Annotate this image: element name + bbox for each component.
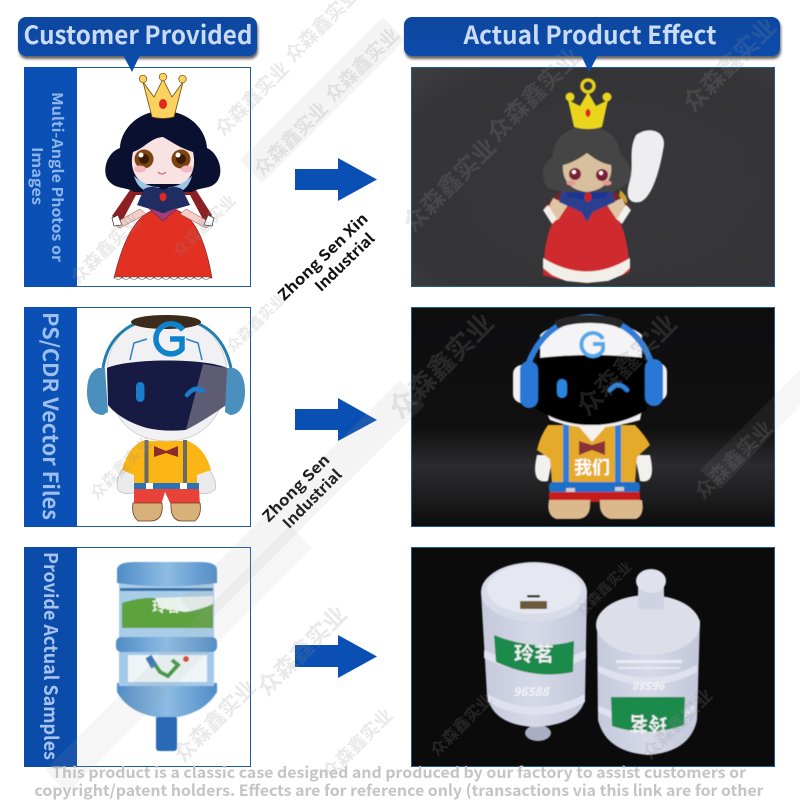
panel: miniature bottles result	[412, 548, 774, 766]
photo: right power bank bottle	[596, 569, 700, 755]
illustration: cartoon princess	[105, 73, 220, 280]
sidebar label: Multi-Angle Photos or Images: Multi-Angle Photos or	[47, 92, 68, 262]
footer disclaimer text	[34, 761, 764, 800]
panel: princess keychain result	[412, 68, 774, 286]
text: 众森鑫实业	[208, 55, 294, 141]
text: 众森鑫实业	[318, 21, 404, 107]
text: 众森鑫实业	[222, 289, 290, 357]
photo: right power bank bottle: 玲茗	[629, 711, 667, 738]
text: 众森鑫实业	[673, 8, 783, 118]
text: 众森鑫实业	[393, 128, 503, 238]
panel: actual samples input	[24, 547, 250, 767]
text: 众森鑫实业	[378, 303, 501, 426]
text: 众森鑫实业	[247, 95, 333, 181]
text: 众森鑫实业	[64, 207, 146, 289]
header: Customer Provided: Customer Provided	[24, 16, 252, 52]
photo: princess keychain	[543, 80, 664, 283]
photo: water bottle: 玲茗	[152, 597, 180, 617]
text: 众森鑫实业	[167, 188, 240, 262]
text: 众森鑫实业	[316, 702, 398, 784]
panel: multi-angle photos input	[24, 67, 250, 287]
footer disclaimer text: This product is a classic case designed and produced by our factory to assist customers or	[52, 761, 746, 783]
photo: robot figurine	[513, 317, 667, 519]
arrow: row 2	[295, 398, 377, 441]
sidebar label: Provide Actual Samples: Provide Actual Samples	[38, 552, 65, 760]
sidebar label: Multi-Angle Photos or Images	[24, 67, 77, 287]
text: 众森鑫实业	[477, 38, 587, 148]
photo: left power bank bottle: 玲茗	[514, 638, 554, 667]
label: Zhong Sen Industrial: Zhong Sen	[257, 449, 334, 527]
header: Customer Provided	[18, 16, 257, 72]
text: 众森鑫实业	[636, 682, 718, 764]
sidebar label: Provide Actual Samples	[24, 547, 77, 767]
label: Zhong Sen Xin Industrial: Zhong Sen Xin	[273, 208, 372, 305]
sidebar label: Multi-Angle Photos or Images: Images	[27, 147, 48, 205]
photo: left power bank bottle: 96588	[513, 683, 551, 700]
photo: left power bank bottle	[481, 562, 587, 741]
label: Zhong Sen Industrial: Industrial	[278, 464, 347, 533]
text: 众森鑫实业	[248, 597, 353, 702]
text: 众森鑫实业	[167, 672, 262, 768]
photo: water bottle	[116, 562, 217, 751]
text: 众森鑫实业	[566, 305, 685, 423]
photo: robot figurine: 我们	[574, 454, 610, 480]
sidebar label: PS/CDR Vector Files: PS/CDR Vector Files	[36, 312, 66, 520]
text: 众森鑫实业	[424, 687, 497, 761]
header: Actual Product Effect: Actual Product Effect	[463, 16, 717, 52]
photo: right power bank bottle: 96588	[632, 678, 666, 694]
text: 众森鑫实业	[84, 430, 157, 504]
label: Zhong Sen Xin Industrial: Industrial	[310, 228, 379, 296]
illustration: cartoon robot mascot	[87, 315, 245, 521]
sidebar label: PS/CDR Vector Files	[24, 307, 77, 527]
label: Zhong Sen Industrial	[257, 449, 348, 540]
arrow: row 3	[295, 635, 377, 678]
label: Zhong Sen Xin Industrial	[273, 208, 386, 319]
arrow: row 1	[295, 158, 377, 201]
panel: robot figurine result	[412, 308, 774, 526]
text: 众森鑫实业	[687, 413, 778, 504]
panel: vector files input	[24, 307, 250, 527]
header: Actual Product Effect	[404, 16, 780, 72]
text: 众森鑫实业	[572, 557, 636, 621]
